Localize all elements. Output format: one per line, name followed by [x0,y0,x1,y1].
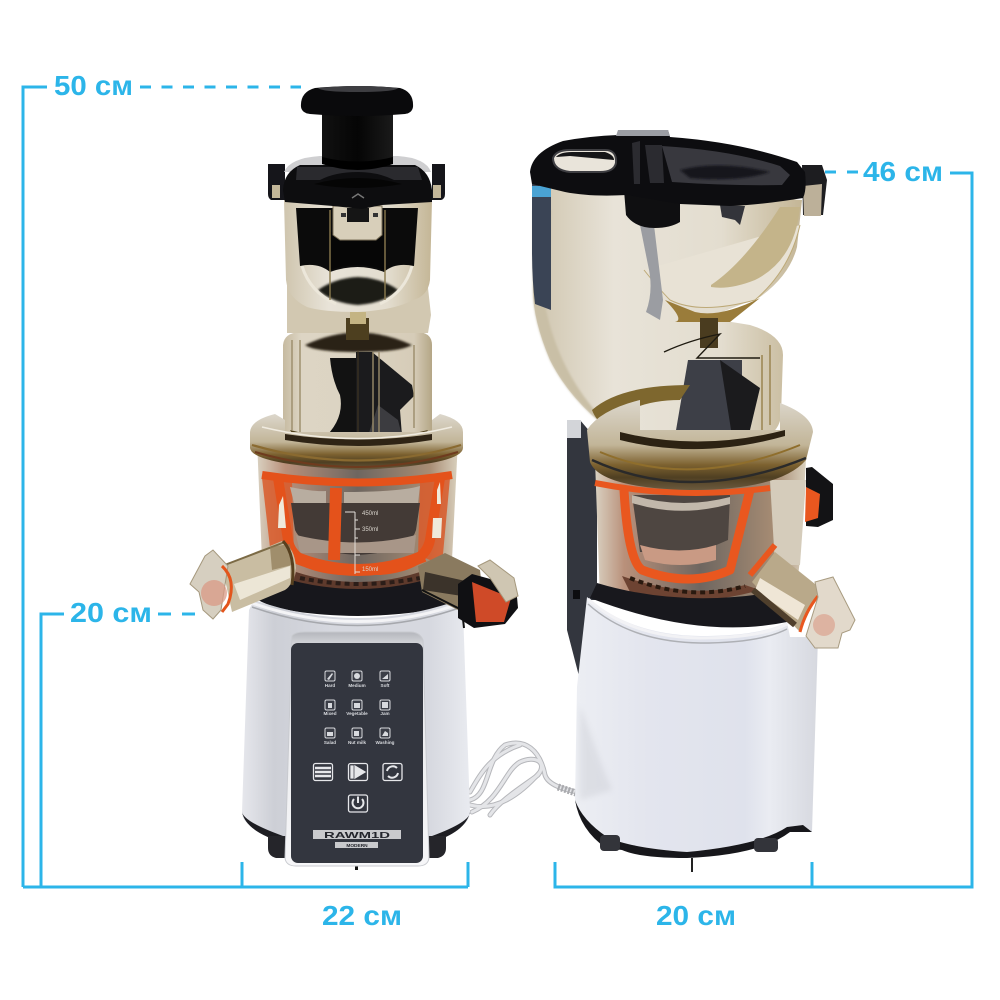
side spout cap [806,577,855,648]
bowl windows [278,482,442,538]
control panel [285,632,429,866]
mode labels [323,683,395,745]
icon: foot pin [691,858,693,872]
side sticker [532,183,551,310]
logo plate: MODERN [346,843,368,849]
mode labels: Jam [380,711,390,716]
dark base collar [258,572,460,616]
translucent orange sides [262,478,450,565]
lid bottom tab [624,190,680,228]
black lid [283,165,432,209]
side bowl lighter right [770,480,806,565]
logo plate: RAWM1D [324,830,390,840]
hopper amber shadow [533,210,632,445]
upper right knob [806,467,833,527]
side dark collar [590,583,787,627]
mode labels: Mixed [323,711,337,716]
right lid latch [802,165,827,215]
side auger [674,360,742,442]
measuring scale [345,511,378,574]
panel face [291,643,423,863]
strainer body [291,503,420,555]
lid lock window [333,206,382,240]
dimension: 50 cm height: 50 см [54,70,133,101]
shaft coupling [346,318,369,340]
measuring scale: 150ml [362,567,378,573]
dimension: 22 cm width [23,862,468,931]
body left highlight [580,705,612,800]
mode labels: Medium [348,683,366,688]
top handle [616,130,670,136]
dimension: 20 cm base height [41,597,200,887]
dimension: 20 cm depth and 46 cm height: 46 см [863,156,943,187]
gear teeth ring [292,572,425,593]
lid ridge [632,141,664,184]
juicer: side view [530,130,855,872]
button: power [348,795,368,812]
logo plate [313,830,401,849]
dimension: 20 cm base height: 20 см [70,597,152,628]
mode labels: Washing [376,740,395,745]
auger screw [290,352,428,442]
button: menu [314,764,332,780]
icon: foot pin [355,866,358,870]
plastic paddle [640,225,663,320]
wide hopper [533,185,802,445]
juicer: front view [190,86,518,870]
lid opening [553,150,616,172]
bowl top rings [250,414,463,470]
dimension: 50 cm height [23,70,301,887]
measuring scale: 450ml [362,511,378,517]
juicing bowl [257,440,458,592]
side gear teeth [622,576,760,601]
side juicing bowl [595,460,806,600]
funnel shaft [665,298,760,322]
side motor body [575,597,818,852]
neck between hopper and cylinder [287,270,431,333]
measuring scale: 350ml [362,527,378,533]
mode labels: Hard [325,683,335,688]
strainer mesh [290,486,420,503]
right spout cap [458,574,518,628]
base black bottom [242,812,470,843]
cylinder ribs [292,340,414,436]
bottom rim seen through hopper [592,385,690,442]
funnel bowl inner [644,225,800,308]
pusher stem [322,113,393,163]
power cable [470,743,578,815]
left juice spout [190,541,296,619]
panel frame [285,632,429,866]
dimension: 22 cm width: 22 см [322,900,402,931]
left spout cap [190,550,228,619]
right juice spout [418,553,518,628]
button: reverse [383,764,402,780]
button: play [348,764,368,780]
side base black [575,800,812,858]
side strainer [632,495,730,552]
lower feed cylinder [283,332,432,442]
dimension: 20 cm depth and 46 cm height: 20 см [656,900,736,931]
lid pale top [284,156,431,172]
side spout [752,552,820,632]
dimension: 20 cm depth and 46 cm height [555,156,972,931]
lid dome [662,146,790,185]
upper hopper [284,200,432,312]
dark reflection in hopper [296,208,418,272]
mode labels: Vegetable [346,711,368,716]
side lid tabs [268,164,285,200]
mode labels: Nut milk [348,740,367,745]
motor base [242,600,470,838]
mode labels: Salad [324,740,336,745]
side orange frame [595,483,775,579]
mode icons [325,671,390,738]
side bowl rim [587,400,813,490]
mode labels: Soft [381,683,390,688]
black lid [530,130,806,206]
orange frame [262,475,452,570]
rear black column [567,420,597,680]
top of neck shadow [305,332,412,352]
pusher cap [301,86,413,116]
